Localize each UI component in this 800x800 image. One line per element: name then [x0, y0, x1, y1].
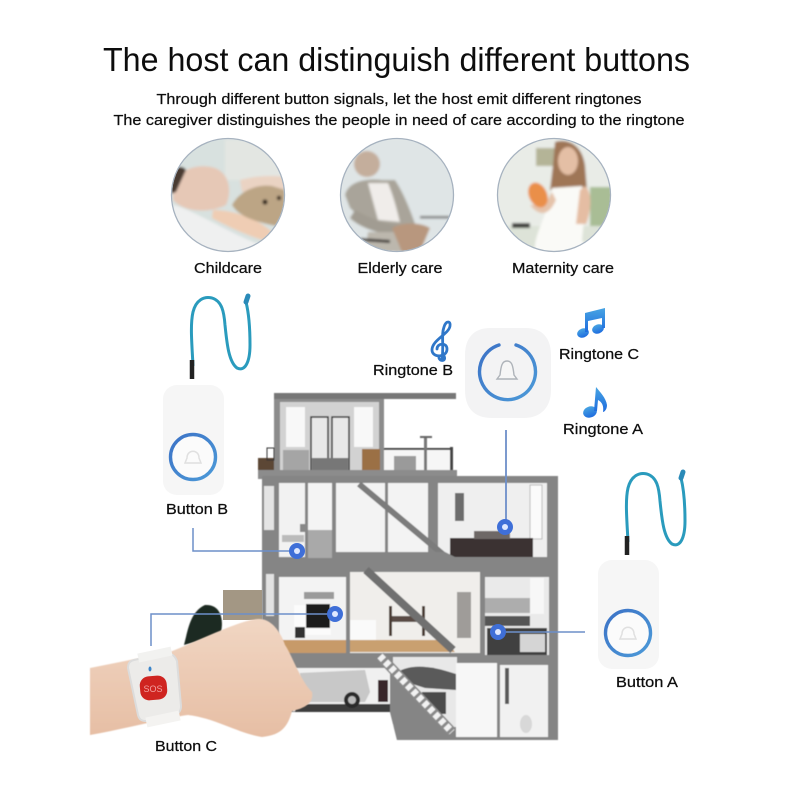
button labels [155, 501, 678, 755]
wristband [128, 647, 181, 727]
ringtone labels [373, 346, 643, 438]
wristband: SOS [143, 684, 163, 694]
first floor rooms [266, 572, 549, 655]
upper staircase [359, 484, 445, 556]
care labels: Maternity care [512, 260, 614, 277]
basement white stair [380, 656, 452, 732]
button labels: Button A [616, 674, 678, 691]
device: button B [163, 385, 224, 495]
connector line: central button [505, 430, 507, 526]
ringtone labels: Ringtone C [559, 346, 639, 363]
care labels: Childcare [194, 260, 262, 277]
photo: childcare [170, 138, 286, 256]
main building body [262, 476, 558, 740]
care labels: Elderly care [358, 260, 442, 277]
icon: double music note [576, 308, 605, 339]
penthouse frame [274, 393, 456, 477]
trellis [223, 590, 262, 620]
connector line: button A [498, 631, 585, 633]
ringtone labels: Ringtone B [373, 362, 453, 379]
title: The host can distinguish different buttons [103, 41, 690, 78]
mid slab [360, 552, 558, 577]
hand with wristband [90, 619, 312, 737]
lower stair flight [366, 570, 453, 650]
subtitle text block: Through different button signals, let the host emit different ringtones [156, 91, 642, 108]
icon: treble clef note [432, 322, 450, 360]
photo: maternity care [497, 138, 614, 252]
lanyard: button A [626, 472, 685, 555]
ringtone labels: Ringtone A [563, 421, 643, 438]
terrace [258, 436, 457, 479]
button labels: Button C [155, 738, 217, 755]
second floor rooms [264, 483, 547, 558]
lanyard: button B [191, 296, 250, 379]
connector line: button B [193, 528, 297, 551]
connector line: button C [151, 614, 335, 646]
subtitle text block: The caregiver distinguishes the people in need of care according to the ringtone [114, 112, 684, 129]
subtitle text block [114, 91, 684, 129]
house cross-section [258, 393, 558, 740]
basement gray wedge [390, 672, 456, 740]
tree behind wrist [184, 605, 222, 645]
basement rooms [293, 657, 548, 737]
icon: single music note [582, 387, 607, 420]
device: button A [598, 560, 659, 669]
care labels [194, 260, 614, 277]
device: central receiver [465, 328, 551, 418]
node markers [289, 519, 513, 640]
photo: elderly care [340, 138, 456, 252]
button labels: Button B [166, 501, 228, 518]
